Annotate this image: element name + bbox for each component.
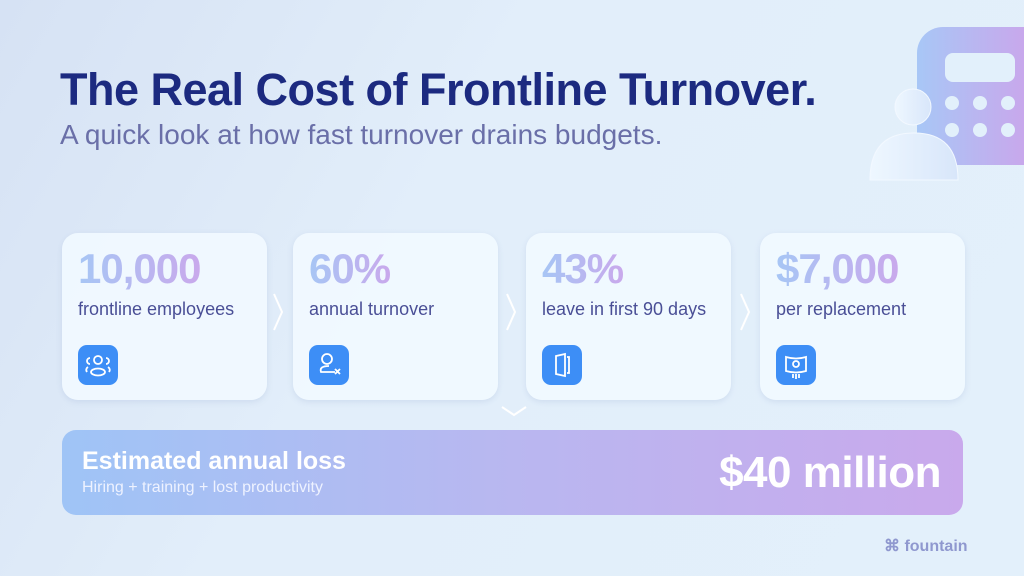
card: employees: frontline employees: [78, 299, 234, 319]
icon: money: [776, 345, 816, 385]
card: turnover: annual turnover: [309, 299, 434, 319]
card: turnover: [293, 233, 498, 400]
heading: Estimated annual loss: [82, 447, 346, 475]
card: replacement cost: [760, 233, 965, 400]
icon: door: [542, 345, 582, 385]
card: early leavers: [526, 233, 731, 400]
card: employees: 10,000: [78, 245, 200, 292]
icon: group: [78, 345, 118, 385]
icon: person remove: [309, 345, 349, 385]
subtitle: A quick look at how fast turnover drains budgets.: [60, 119, 662, 150]
logo: ⌘ fountain: [884, 538, 968, 555]
arrow: [506, 294, 516, 330]
arrow: down: [502, 406, 526, 416]
card: early leavers: 43%: [542, 245, 623, 292]
arrow: [740, 294, 750, 330]
panel: estimated annual loss: [62, 430, 963, 515]
card: turnover: 60%: [309, 245, 390, 292]
arrow: [273, 294, 283, 330]
subtext: Hiring + training + lost productivity: [82, 479, 323, 496]
icon: calculator with person: [870, 27, 1024, 180]
card: replacement cost: $7,000: [776, 245, 898, 292]
card: replacement cost: per replacement: [776, 299, 906, 319]
title: The Real Cost of Frontline Turnover.: [60, 64, 816, 115]
card: employees: [62, 233, 267, 400]
value: $40 million: [719, 448, 941, 497]
card: early leavers: leave in first 90 days: [542, 299, 706, 319]
